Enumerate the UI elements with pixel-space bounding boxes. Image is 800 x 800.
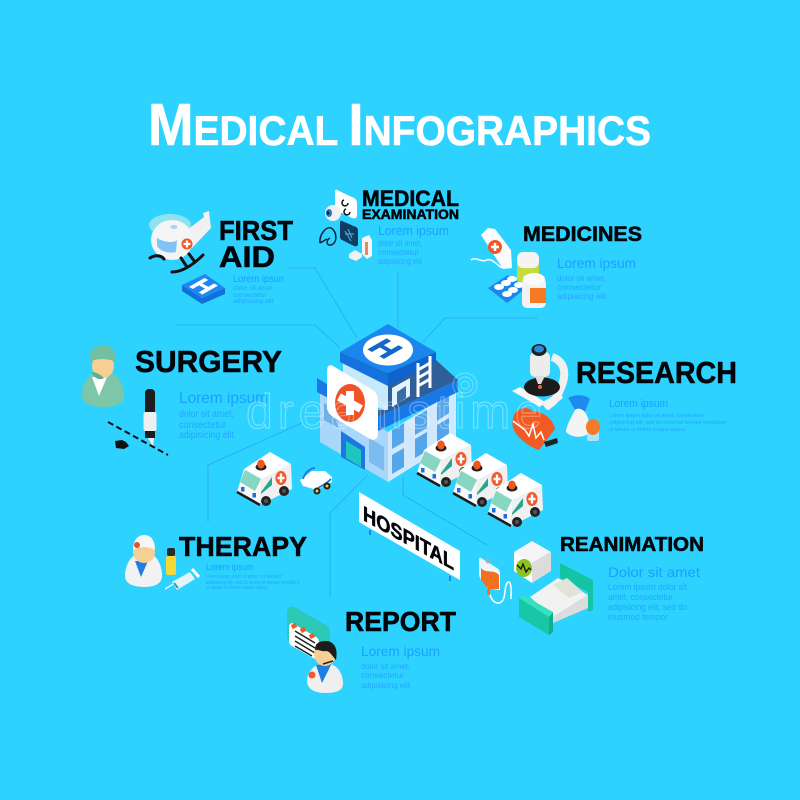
title: MEDICAL INFOGRAPHICS (148, 92, 651, 158)
icon: x-ray (340, 221, 358, 246)
text block: medicines: Lorem ipsum (557, 255, 636, 271)
building upper floor (343, 360, 458, 417)
text block: reanimation: Lorem ipsum dolor sit (608, 582, 687, 592)
icon: clipboard (287, 607, 330, 662)
text block: research: Lorem ipsum (609, 398, 668, 410)
heading: reanimation: REANIMATION (560, 534, 704, 556)
icon: pill box (349, 250, 362, 261)
text block: research: adipisicing elit, sed do eiusmod tempor incididunt (609, 420, 726, 426)
text block: research: Lorem ipsum dolor sit amet, consectetur (609, 413, 704, 419)
icon: orange bottle (522, 273, 546, 308)
building roof (340, 324, 436, 386)
text block: therapy: adipisicing elit, sed do eiusmod tempor incididunt (206, 580, 300, 586)
panel: report (287, 606, 456, 693)
icon: heart with ecg (512, 408, 558, 450)
icon: helicopter (149, 211, 211, 272)
icon: syringe (165, 569, 199, 590)
icon: ambulance 1 (237, 452, 292, 506)
icon: scissors mark (115, 440, 129, 449)
panel: first aid (149, 211, 293, 305)
icon: helipad tile: H (183, 275, 223, 298)
text block: medical examination: Lorem ipsum (378, 223, 449, 238)
panel: medical examination (320, 186, 459, 266)
text block: report: adipisicing elit (361, 680, 411, 690)
text block: medical examination (378, 223, 449, 266)
panel: surgery (82, 344, 282, 455)
icon: operator (307, 641, 343, 693)
dashed cut line (108, 422, 168, 455)
panel: hospital building (317, 324, 458, 482)
text block: medicines (557, 255, 636, 301)
panel: research (512, 344, 737, 450)
text block: medicines: consectetur (557, 282, 601, 292)
text block: research (609, 398, 726, 433)
heading: therapy: THERAPY (179, 531, 307, 562)
icon: surgeon (82, 345, 124, 407)
heading: medicines: MEDICINES (523, 223, 642, 246)
text block: medicines: adipisicing elit (557, 291, 607, 301)
text block: first aid: Lorem ipsun (233, 274, 284, 285)
text block: medical examination: adipisicing elit (378, 256, 423, 266)
heading: first aid: FIRST (219, 215, 293, 246)
text block: reanimation: Dolor sit amet (608, 564, 700, 580)
heading: first aid (219, 215, 293, 274)
text block: reanimation (608, 564, 700, 622)
heading: surgery: SURGERY (135, 344, 282, 379)
hospital cross sign (327, 365, 378, 440)
text block: first aid: adipisicing elit (233, 298, 274, 305)
icon: ambulance 3 (453, 453, 508, 507)
icon: green bottle (517, 252, 539, 282)
text block: reanimation: eiusmod tempor (608, 612, 668, 622)
heading: medical examination (362, 186, 459, 222)
roof ladder (418, 356, 430, 397)
text block: surgery (179, 390, 268, 441)
text block: first aid (233, 274, 284, 305)
icon: small cart (300, 468, 332, 494)
text block: therapy: Lorem ipsum dolor sit amet, consectetur (206, 574, 282, 580)
icon: stethoscope (320, 228, 336, 245)
building roof: H (360, 334, 410, 363)
text block: report: Lorem ipsum (361, 643, 440, 659)
icon: flask (566, 395, 590, 437)
panel: therapy (125, 531, 307, 591)
text block: surgery: consectetur (179, 420, 227, 431)
icon: specimen jar (586, 419, 600, 441)
icon: thermometer (362, 235, 372, 259)
panel: reanimation (479, 534, 704, 635)
text block: surgery: Lorem ipsum (179, 390, 268, 407)
icon: blister pack (488, 275, 526, 303)
text block: reanimation: amet, consectetur (608, 592, 673, 602)
hospital sign: HOSPITAL (363, 501, 454, 575)
text block: therapy: Lorem ipsum (206, 562, 254, 572)
text block: report: consectetur (361, 670, 404, 680)
heading: medical examination: MEDICAL (362, 186, 459, 211)
text block: research: ut labore et dolore magna aliqua. (609, 427, 686, 433)
icon: microscope (512, 344, 564, 410)
text block: medical examination: dolor sit amet, (378, 238, 422, 248)
text block: therapy: ut labore et dolore magna aliqua. (206, 585, 268, 591)
text block: reanimation: adipisicing elit, sed do (608, 602, 687, 612)
panel: medicines (471, 223, 642, 308)
building door (341, 431, 365, 470)
icon: scalpel pen (144, 389, 156, 447)
icon: hospital bed (519, 563, 593, 635)
icon: monitor (514, 541, 551, 583)
icon: vial (166, 548, 176, 575)
heading: report: REPORT (345, 606, 456, 637)
text block: first aid: consectetur (233, 292, 267, 299)
icon: eye chart card (325, 190, 357, 221)
building blue band (317, 378, 458, 431)
heading: research: RESEARCH (576, 355, 737, 390)
icon: ambulance 2 (417, 433, 472, 487)
text block: surgery: dolor sit amet, (179, 409, 234, 420)
icon: ambulance 4 (488, 473, 543, 527)
text block: surgery: adipisicing elit (179, 430, 234, 441)
heading: medical examination: EXAMINATION (362, 206, 459, 222)
icon: ointment tube (471, 228, 512, 269)
connector lines (175, 268, 538, 597)
icon: doctor (125, 535, 162, 587)
text block: medicines: dolor sit amet, (557, 273, 606, 283)
watermark: dreamstime (246, 386, 542, 439)
building lower block (320, 390, 456, 482)
text block: medical examination: consectetur (378, 247, 419, 257)
text block: therapy (206, 562, 300, 591)
text block: report (361, 643, 440, 690)
text block: report: dolor sit amet, (361, 661, 410, 671)
heading: first aid: AID (219, 241, 275, 274)
icon: iv bag (479, 558, 511, 603)
text block: first aid: dolor sit amet, (233, 285, 274, 292)
